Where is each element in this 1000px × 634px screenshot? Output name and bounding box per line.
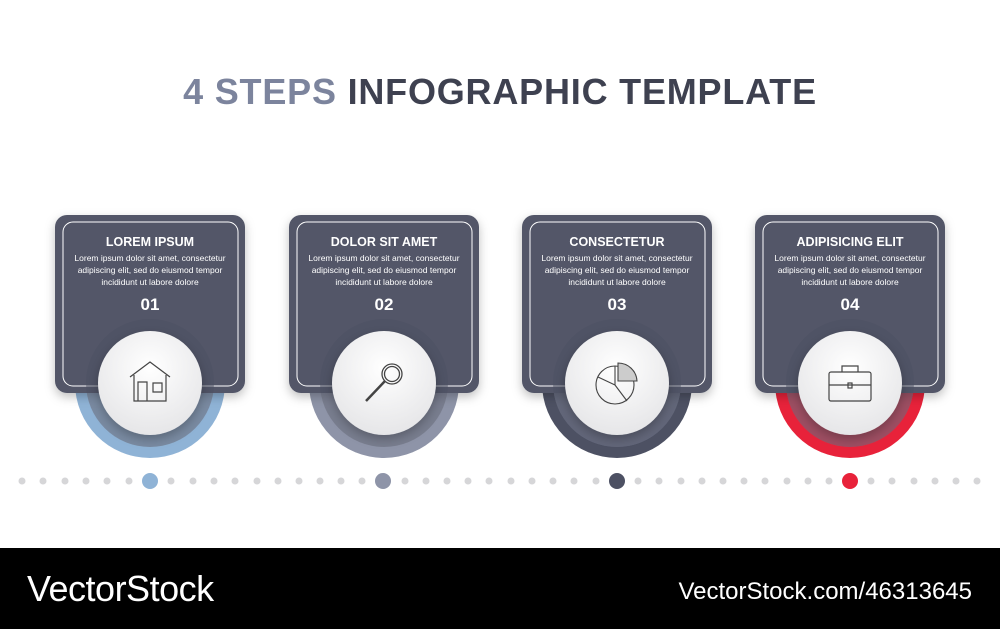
- heading: step 2: DOLOR SIT AMET: [331, 235, 438, 249]
- text: step 4: Lorem ipsum dolor sit amet, consectetur: [774, 253, 926, 263]
- icon circle: magnifier: [332, 331, 436, 435]
- step 1: [55, 215, 245, 458]
- step 3: [522, 215, 712, 458]
- heading: step 3: CONSECTETUR: [569, 235, 665, 249]
- footer bar: VectorStock: [27, 568, 215, 609]
- icon circle: briefcase: [798, 331, 902, 435]
- number: 03: 03: [608, 295, 626, 314]
- text: step 4: incididunt ut labore dolore: [801, 277, 899, 287]
- title: 4 STEPS INFOGRAPHIC TEMPLATE: [183, 71, 817, 112]
- text: step 3: incididunt ut labore dolore: [568, 277, 666, 287]
- card: step 3: [522, 215, 712, 393]
- text: step 3: Lorem ipsum dolor sit amet, consectetur: [541, 253, 693, 263]
- step 4: [755, 215, 945, 458]
- timeline dots: [18, 473, 980, 489]
- heading: step 1: LOREM IPSUM: [106, 235, 194, 249]
- icon circle: house: [98, 331, 202, 435]
- footer bar: [0, 548, 1000, 629]
- card: step 4: [755, 215, 945, 393]
- number: 01: 01: [141, 295, 159, 314]
- text: step 2: incididunt ut labore dolore: [335, 277, 433, 287]
- heading: step 4: ADIPISICING ELIT: [797, 235, 904, 249]
- text: step 4: adipiscing elit, sed do eiusmod tempor: [778, 265, 922, 275]
- text: step 2: adipiscing elit, sed do eiusmod tempor: [312, 265, 456, 275]
- card: step 2: [289, 215, 479, 393]
- icon circle: pie chart: [565, 331, 669, 435]
- text: step 1: adipiscing elit, sed do eiusmod tempor: [78, 265, 222, 275]
- number: 02: 02: [375, 295, 393, 314]
- footer bar: VectorStock.com/46313645: [678, 578, 972, 605]
- text: step 1: Lorem ipsum dolor sit amet, consectetur: [74, 253, 226, 263]
- text: step 3: adipiscing elit, sed do eiusmod tempor: [545, 265, 689, 275]
- number: 04: 04: [841, 295, 860, 314]
- text: step 2: Lorem ipsum dolor sit amet, consectetur: [308, 253, 460, 263]
- step 2: [289, 215, 479, 458]
- ring: step 1: [75, 308, 225, 458]
- text: step 1: incididunt ut labore dolore: [101, 277, 199, 287]
- card: step 1: [55, 215, 245, 393]
